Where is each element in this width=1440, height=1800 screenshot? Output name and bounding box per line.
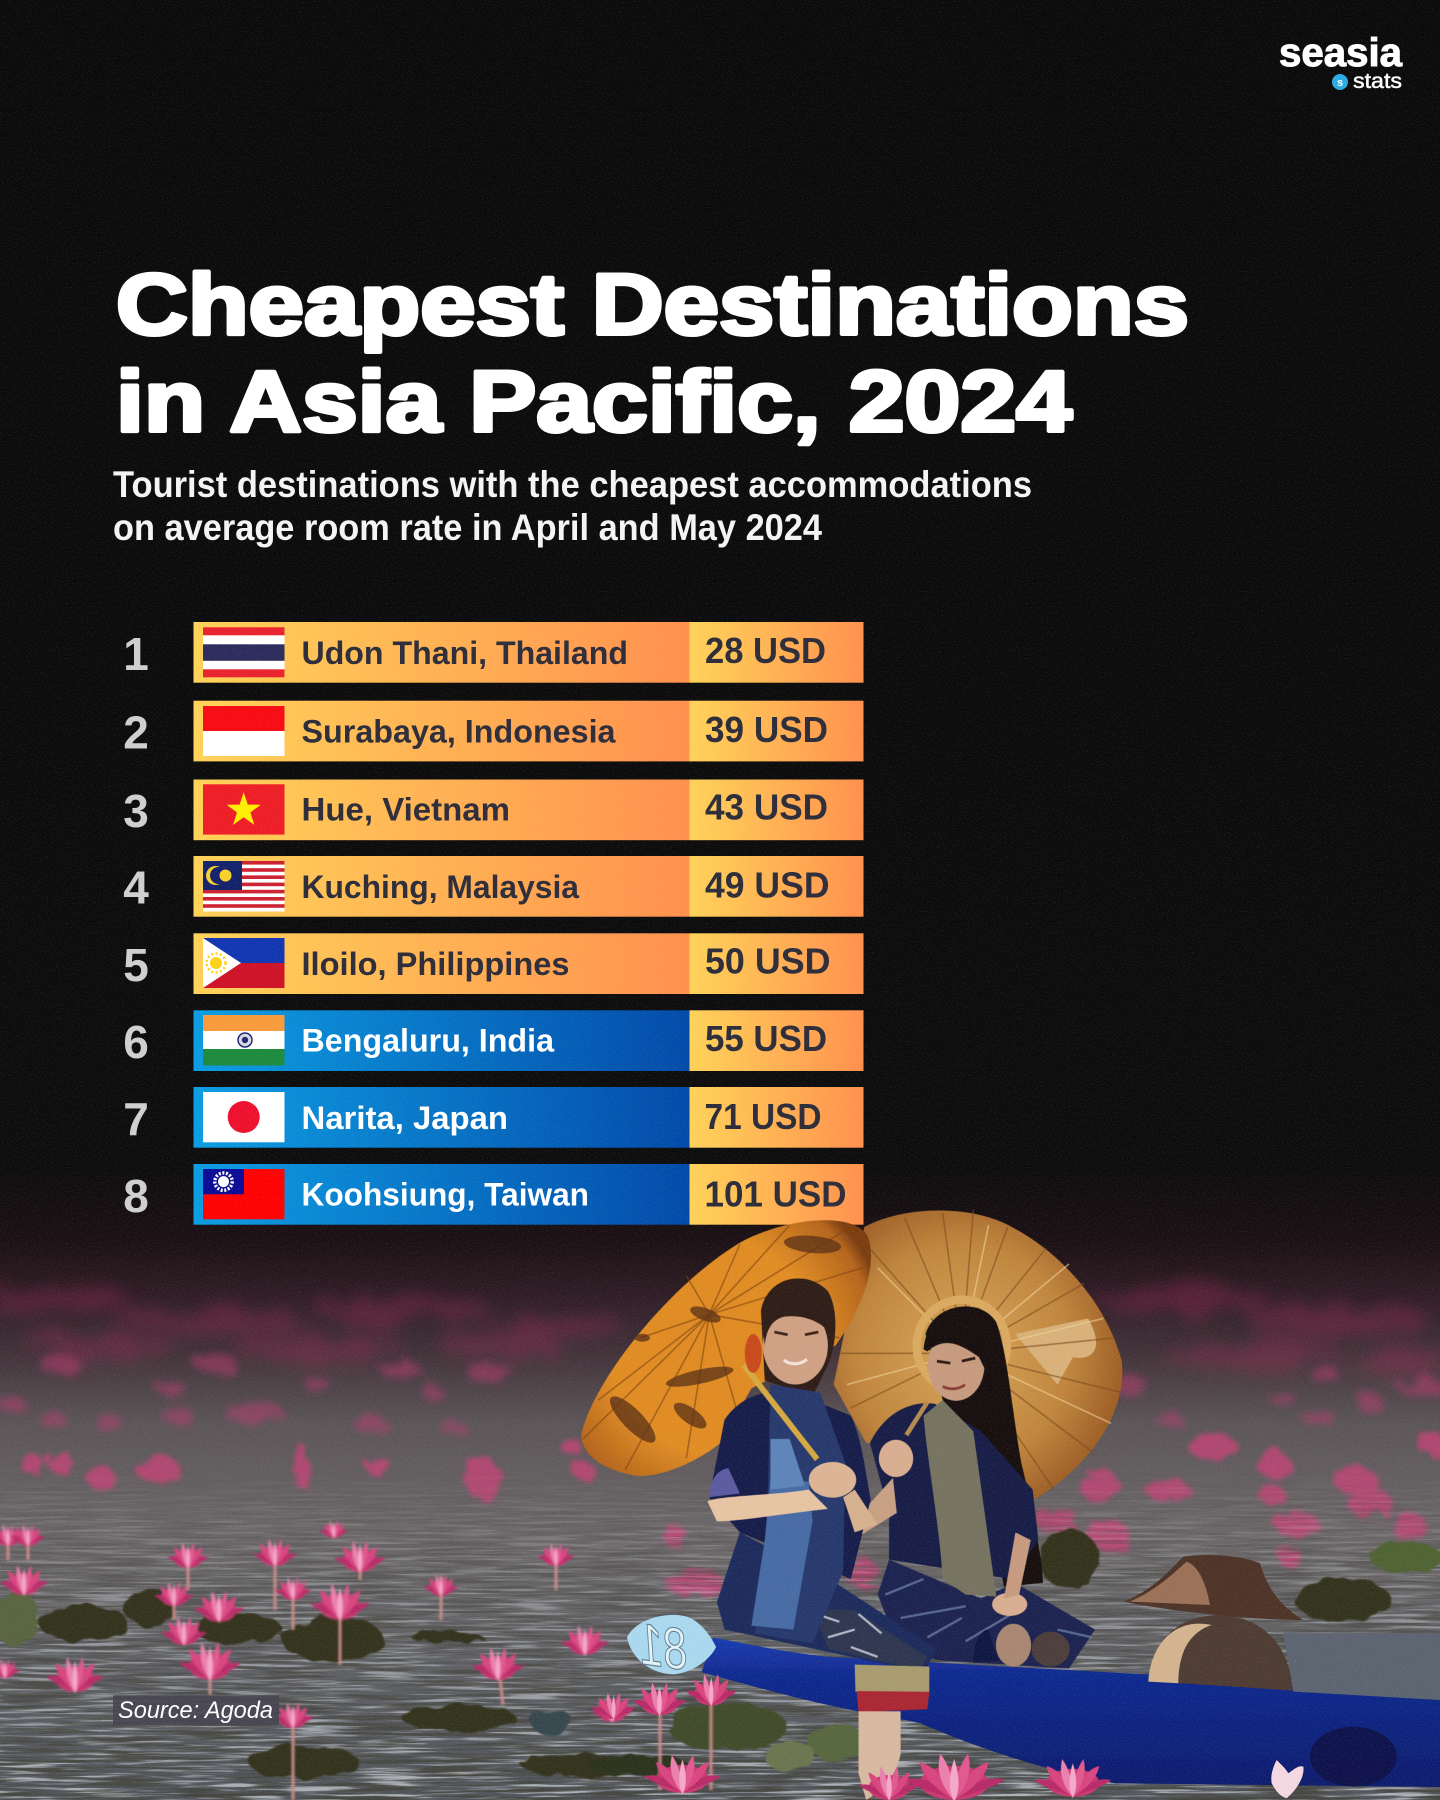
rank number 2: 2 (123, 706, 149, 758)
woman on the left (707, 1278, 937, 1800)
logo: seasia stats: stats (1353, 70, 1402, 93)
price: 49 USD (705, 864, 830, 906)
price: 43 USD (705, 786, 828, 828)
subtitle (113, 464, 1032, 548)
ranking table (123, 622, 864, 1225)
price: 50 USD (705, 940, 830, 982)
front umbrella (581, 1220, 871, 1476)
flag: Taiwan (203, 1169, 284, 1219)
destination name: Iloilo, Philippines (302, 946, 570, 982)
name bar (194, 780, 690, 840)
source note: Source: Agoda (118, 1697, 273, 1724)
title: Cheapest Destinations (116, 257, 1189, 353)
destination name: Udon Thani, Thailand (302, 635, 628, 671)
woman on the right (851, 1306, 1095, 1668)
price bar (690, 622, 864, 683)
price: 101 USD (704, 1174, 846, 1214)
name bar (194, 622, 690, 683)
flag: Philippines (203, 938, 284, 988)
rank number 6: 6 (123, 1016, 149, 1068)
flag: Indonesia (203, 706, 284, 756)
subtitle: Tourist destinations with the cheapest accommodations (113, 464, 1032, 505)
background: dark field fading into lotus lake (0, 1207, 1440, 1800)
scene: two women on a boat under paper umbrellas (581, 1209, 1440, 1800)
price bar (690, 1010, 864, 1071)
lily pads (0, 1529, 1440, 1779)
price bar (690, 701, 864, 761)
row 2: Surabaya (123, 701, 864, 761)
destination name: Surabaya, Indonesia (302, 714, 616, 750)
row 3: Hue (123, 780, 864, 840)
title: in Asia Pacific, 2024 (116, 354, 1072, 450)
logo: seasia stats: seasia (1279, 31, 1403, 75)
name bar (194, 1087, 690, 1148)
price: 71 USD (704, 1096, 822, 1137)
price bar (690, 1087, 864, 1148)
price bar (690, 1164, 864, 1225)
name bar (194, 933, 690, 994)
flag: Thailand (203, 627, 284, 677)
row 4: Kuching (123, 856, 864, 917)
row 5: Iloilo (123, 933, 864, 994)
destination name: Kuching, Malaysia (302, 869, 579, 905)
foreground flowers near the boat (592, 1674, 1112, 1800)
flag: India (203, 1015, 284, 1066)
subtitle: on average room rate in April and May 2024 (113, 507, 822, 548)
price: 39 USD (705, 709, 828, 750)
title (116, 257, 1189, 450)
rank number 4: 4 (123, 862, 149, 914)
row 6: Bengaluru (123, 1010, 864, 1071)
logo: seasia stats: s (1337, 77, 1343, 89)
boat: 81 (637, 1611, 690, 1683)
rank number 8: 8 (123, 1170, 149, 1222)
lotus flowers (0, 1520, 711, 1800)
rank number 7: 7 (123, 1093, 149, 1145)
rank number 3: 3 (123, 785, 149, 837)
destination name: Hue, Vietnam (302, 792, 510, 828)
boat (627, 1611, 1440, 1787)
flag: Japan (203, 1092, 284, 1142)
flag: Vietnam (203, 784, 284, 835)
destination name: Narita, Japan (302, 1100, 508, 1136)
flag: Malaysia (203, 861, 284, 912)
name bar (194, 701, 690, 761)
name bar (194, 1010, 690, 1071)
row 8: Koohsiung (123, 1164, 864, 1225)
name bar (194, 856, 690, 917)
price bar (690, 780, 864, 840)
rank number 1: 1 (123, 628, 149, 680)
back umbrella (834, 1209, 1122, 1499)
price: 55 USD (705, 1018, 827, 1059)
price bar (690, 856, 864, 917)
row 7: Narita (123, 1087, 864, 1148)
name bar (194, 1164, 690, 1225)
row 1: Udon Thani (123, 622, 864, 683)
boat interior, bucket and straw hat (1123, 1555, 1440, 1798)
price bar (690, 933, 864, 994)
rank number 5: 5 (123, 939, 149, 991)
destination name: Bengaluru, India (302, 1022, 554, 1058)
destination name: Koohsiung, Taiwan (302, 1176, 589, 1212)
price: 28 USD (705, 630, 826, 671)
